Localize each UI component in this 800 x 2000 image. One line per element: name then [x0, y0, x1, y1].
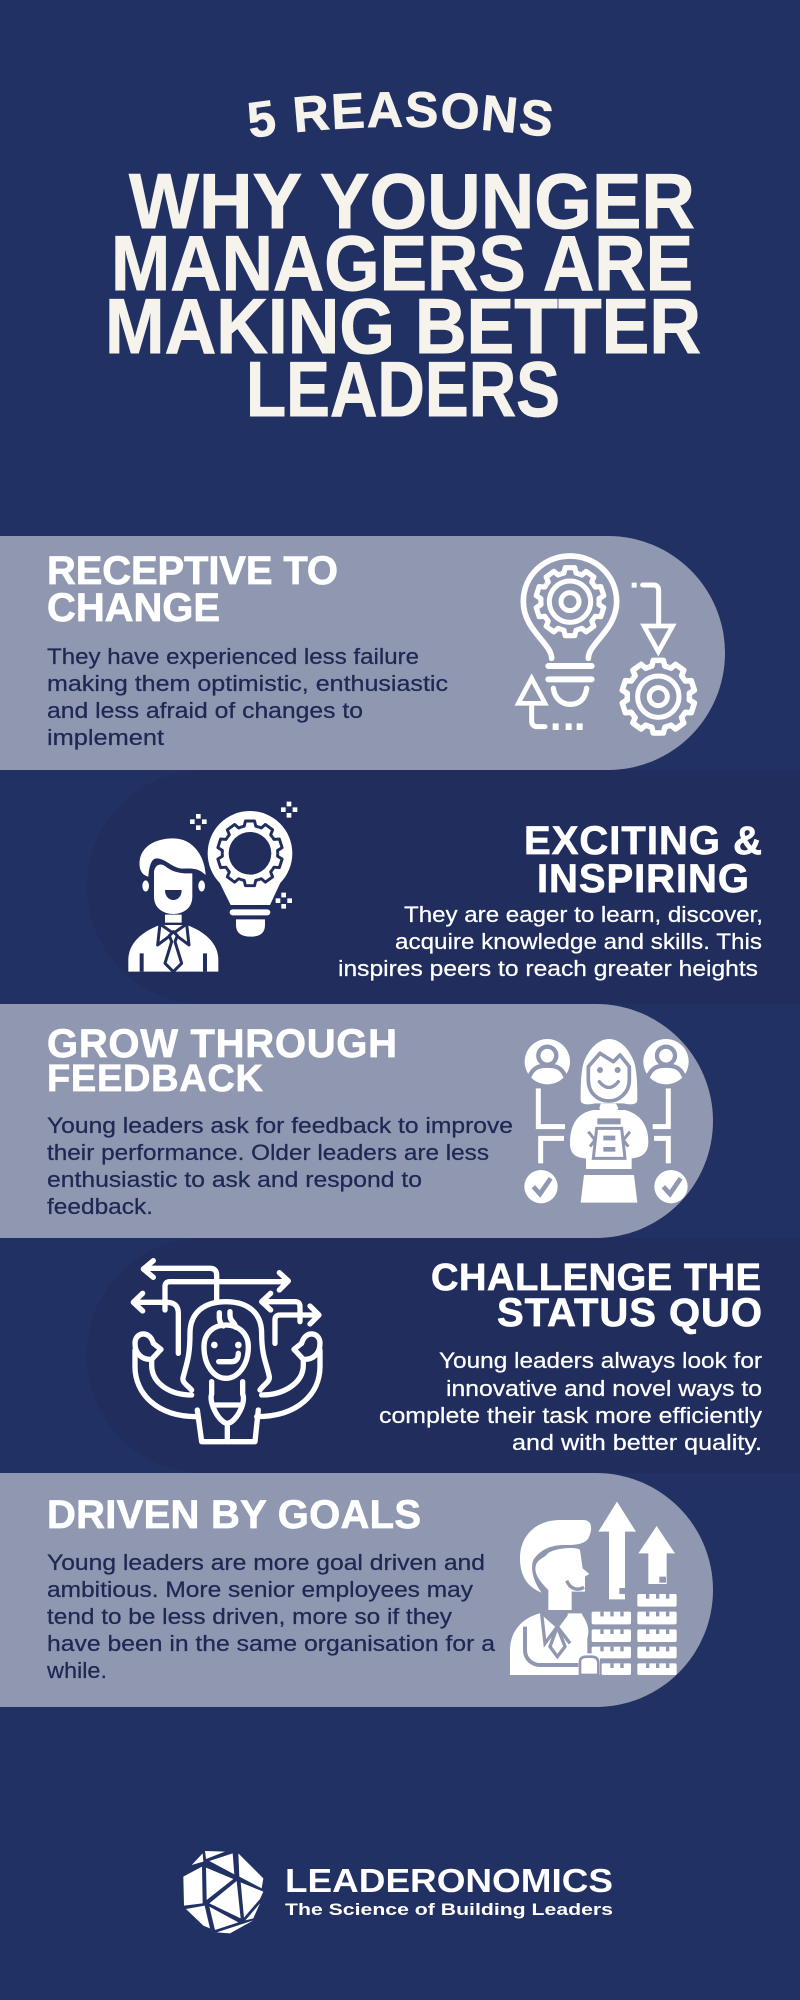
icon: man with light bulb [128, 802, 297, 972]
icon: light bulb and gears [518, 556, 696, 733]
text: exciting and inspiring: inspires peers to reach greater heights [338, 956, 758, 981]
text: challenge the status quo [379, 1348, 762, 1455]
text: receptive to change: and less afraid of changes to [47, 698, 363, 723]
icon: woman with feedback [524, 1039, 689, 1203]
text: challenge the status quo: and with better quality. [512, 1430, 762, 1455]
heading: receptive to change: RECEPTIVE TO [47, 549, 338, 593]
text: grow through feedback: their performance. Older leaders are less [47, 1140, 489, 1165]
title: LEADERS [246, 345, 560, 433]
heading: exciting and inspiring [524, 819, 762, 901]
logo: leaderonomics: LEADERONOMICS [285, 1862, 613, 1899]
text: challenge the status quo: Young leaders always look for [439, 1348, 762, 1373]
heading: challenge the status quo [431, 1257, 762, 1335]
title [105, 157, 701, 433]
text: grow through feedback: enthusiastic to ask and respond to [47, 1167, 422, 1192]
text: driven by goals: ambitious. More senior employees may [47, 1577, 473, 1602]
title: MAKING BETTER [105, 282, 701, 370]
heading: grow through feedback [47, 1022, 397, 1100]
text: driven by goals: while. [46, 1658, 107, 1683]
text: driven by goals: have been in the same organisation for a [47, 1631, 496, 1656]
panel: driven by goals [0, 1473, 713, 1707]
heading: receptive to change: CHANGE [47, 586, 220, 630]
text: challenge the status quo: innovative and novel ways to [446, 1376, 762, 1401]
text: driven by goals: Young leaders are more goal driven and [47, 1550, 485, 1575]
heading: driven by goals: DRIVEN BY GOALS [47, 1493, 421, 1537]
heading: grow through feedback: FEEDBACK [47, 1058, 264, 1100]
icon: woman with arrows [133, 1261, 320, 1442]
title: WHY YOUNGER [129, 157, 695, 245]
heading: exciting and inspiring: INSPIRING [537, 857, 749, 901]
heading: challenge the status quo: STATUS QUO [497, 1291, 762, 1335]
heading: challenge the status quo: CHALLENGE THE [431, 1257, 761, 1299]
heading: receptive to change [47, 549, 338, 630]
text: receptive to change: implement [47, 725, 164, 750]
icon: businessman with rising arrows and coins [510, 1502, 677, 1675]
panel: exciting and inspiring [87, 770, 800, 1004]
text: exciting and inspiring: acquire knowledge and skills. This [395, 929, 762, 954]
icon: faceted logo mark [183, 1851, 263, 1933]
text: receptive to change: making them optimistic, enthusiastic [47, 671, 448, 696]
heading: exciting and inspiring: EXCITING & [524, 819, 762, 863]
subtitle: 5 reasons [248, 92, 552, 138]
text: exciting and inspiring: They are eager to learn, discover, [404, 902, 763, 927]
text: driven by goals [46, 1550, 496, 1683]
panel: receptive to change [0, 536, 725, 770]
heading: grow through feedback: GROW THROUGH [47, 1022, 397, 1066]
logo: leaderonomics [183, 1851, 613, 1933]
text: grow through feedback: Young leaders ask for feedback to improve [47, 1113, 513, 1138]
text: challenge the status quo: complete their task more efficiently [379, 1403, 762, 1428]
title: MANAGERS ARE [111, 219, 693, 307]
panel: grow through feedback [0, 1004, 713, 1238]
text: driven by goals: tend to be less driven, more so if they [47, 1604, 452, 1629]
text: receptive to change [47, 644, 448, 750]
text: receptive to change: They have experienced less failure [47, 644, 419, 669]
text: grow through feedback [47, 1113, 513, 1219]
text: exciting and inspiring [338, 902, 763, 981]
panel: challenge the status quo [86, 1238, 800, 1473]
text: grow through feedback: feedback. [47, 1194, 153, 1219]
subtitle: 5 reasons: 5 REASONS [248, 92, 552, 138]
logo: leaderonomics: The Science of Building Leaders [285, 1900, 613, 1919]
